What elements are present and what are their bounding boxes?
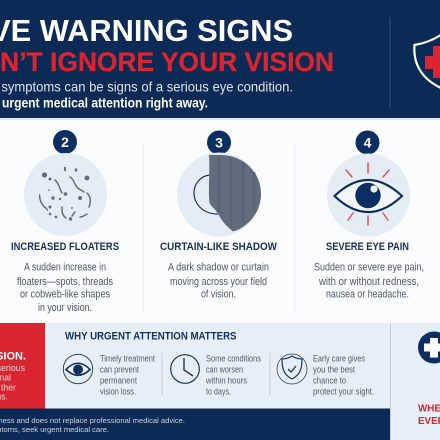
alert text: ther	[1, 382, 16, 392]
panel: why urgent attention matters	[45, 323, 390, 409]
alert text	[0, 363, 26, 402]
panel: increased floaters	[11, 130, 119, 314]
icon: eye	[63, 354, 93, 384]
text: protect your sight.	[313, 386, 374, 398]
number badge 2	[53, 130, 77, 154]
description: floaters—spots, threads	[17, 276, 113, 288]
description: moving across your field	[170, 276, 267, 288]
description: A sudden increase in	[24, 262, 106, 274]
text: permanent	[100, 376, 137, 386]
text: vision loss.	[100, 386, 136, 398]
panel heading: WHY URGENT ATTENTION MATTERS	[65, 330, 236, 342]
icon: shield with cross	[414, 32, 440, 88]
number badge 4	[356, 130, 380, 154]
heading: CURTAIN-LIKE SHADOW	[160, 241, 277, 253]
description: A dark shadow or curtain	[168, 262, 269, 274]
description: Sudden or severe eye pain,	[314, 262, 424, 274]
text: can worsen	[206, 364, 243, 376]
text: Timely treatment	[100, 354, 155, 364]
icon: shield check	[277, 354, 307, 384]
panel: red alert	[0, 323, 45, 409]
number badge 3: 3	[215, 134, 223, 150]
item: timely treatment	[63, 354, 155, 398]
number badge 2: 2	[61, 134, 69, 150]
item: early care	[277, 354, 374, 398]
heading: INCREASED FLOATERS	[11, 241, 119, 253]
text	[100, 354, 155, 398]
text	[313, 354, 374, 398]
description: in your vision.	[38, 302, 92, 314]
footer disclaimer	[0, 408, 390, 440]
panel: when every	[390, 323, 440, 440]
icon: clock	[171, 355, 199, 383]
text: chance to	[313, 376, 346, 386]
call to action text	[418, 404, 440, 427]
description: nausea or headache.	[326, 288, 409, 300]
header banner	[0, 0, 440, 120]
description: with or without redness,	[318, 276, 419, 288]
description: or cobweb-like shapes	[20, 288, 110, 300]
text: within hours	[205, 376, 247, 386]
description	[168, 262, 269, 300]
description	[17, 262, 113, 314]
description: of vision.	[201, 288, 236, 300]
item: conditions worsen	[171, 354, 261, 398]
text: you the best	[313, 364, 355, 376]
text: Some conditions	[206, 354, 261, 364]
number badge 4: 4	[364, 134, 372, 150]
icon: medical cross	[418, 332, 440, 364]
icon: floaters circle	[24, 153, 107, 236]
heading: SEVERE EYE PAIN	[326, 241, 409, 253]
icon: eye with pain rays	[327, 154, 410, 236]
panel: severe eye pain	[314, 130, 424, 300]
number badge 3	[207, 130, 231, 154]
description	[314, 262, 424, 300]
icon: curtain shadow over eye circle	[177, 152, 261, 236]
text: can prevent	[100, 364, 139, 376]
text	[205, 354, 261, 398]
text: to days.	[206, 386, 231, 398]
text: Early care gives	[313, 354, 365, 364]
panel: curtain-like shadow	[160, 130, 277, 300]
